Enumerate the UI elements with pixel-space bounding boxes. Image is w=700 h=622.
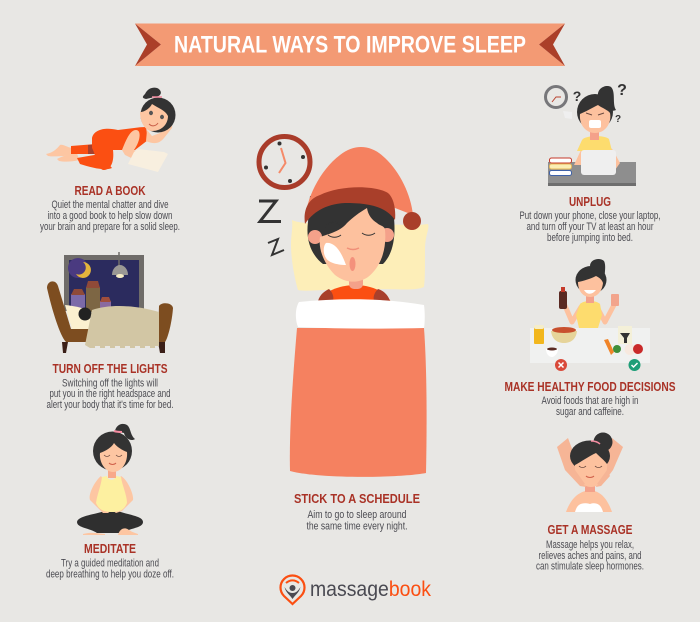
title: NATURAL WAYS TO IMPROVE SLEEP — [174, 32, 526, 58]
text: make healthy food decisions: sugar and caffeine. — [556, 406, 624, 418]
heading: read a book: READ A BOOK — [74, 183, 146, 198]
heading: stick to a schedule: STICK TO A SCHEDULE — [294, 491, 420, 506]
illustration: sleeping person in bed — [259, 136, 428, 477]
blanket fold — [296, 299, 425, 329]
icon: snoring Z letters — [259, 201, 284, 255]
text: unplug: before jumping into bed. — [547, 232, 633, 244]
icon: clock — [546, 86, 566, 108]
nightcap — [305, 147, 413, 223]
text: stick to a schedule: the same time every night. — [306, 520, 408, 532]
nose and mouth — [347, 248, 359, 250]
title banner — [135, 24, 565, 66]
illustration: woman getting a massage — [557, 432, 623, 512]
text: get a massage: Massage helps you relax, — [546, 539, 634, 551]
icon: cross badge — [555, 359, 567, 371]
closed eyes — [325, 222, 375, 237]
text: meditate: deep breathing to help you doze off. — [46, 568, 174, 580]
pillow — [291, 220, 428, 291]
question marks: ? — [573, 88, 581, 104]
shirt and shoulders — [318, 285, 391, 302]
illustration: healthy food choices — [530, 259, 650, 371]
illustration: dark bedroom with window — [47, 252, 173, 353]
heading: turn off the lights: TURN OFF THE LIGHTS — [52, 361, 168, 376]
blanket — [290, 328, 427, 477]
text: get a massage: can stimulate sleep hormones. — [536, 560, 644, 572]
icon: location pin — [280, 576, 305, 604]
text: read a book: Quiet the mental chatter and dive — [52, 199, 168, 211]
hair — [307, 196, 395, 264]
text: get a massage: relieves aches and pains, and — [538, 550, 642, 562]
face — [320, 208, 385, 282]
icon: wall clock — [259, 136, 310, 188]
heading: get a massage: GET A MASSAGE — [548, 522, 633, 537]
snot bubble — [324, 243, 346, 265]
text: read a book: your brain and prepare for a solid sleep. — [40, 221, 180, 233]
text: turn off the lights: Switching off the lights will — [62, 378, 158, 390]
icon: check badge — [628, 359, 640, 371]
text: turn off the lights: put you in the right headspace and — [50, 388, 170, 400]
question marks: ? — [617, 82, 627, 99]
text: read a book: into a good book to help slow down — [48, 210, 172, 222]
illustration: stressed woman at laptop — [546, 82, 636, 186]
text: turn off the lights: alert your body that it's time for bed. — [46, 399, 174, 411]
text: unplug: and turn off your TV at least an hour — [526, 221, 654, 233]
illustration: woman meditating — [77, 424, 143, 535]
text: meditate: Try a guided meditation and — [61, 558, 159, 570]
logo: massagebook — [280, 576, 431, 604]
text: stick to a schedule: Aim to go to sleep around — [308, 509, 406, 521]
question marks — [573, 82, 627, 125]
question marks: ? — [615, 114, 621, 125]
heading: meditate: MEDITATE — [84, 541, 136, 556]
illustration: woman reading a book — [46, 88, 176, 172]
ears — [308, 230, 322, 244]
wordmark: massagebook — [310, 578, 431, 601]
text: make healthy food decisions: Avoid foods that are high in — [542, 395, 638, 407]
heading: unplug: UNPLUG — [569, 194, 611, 209]
